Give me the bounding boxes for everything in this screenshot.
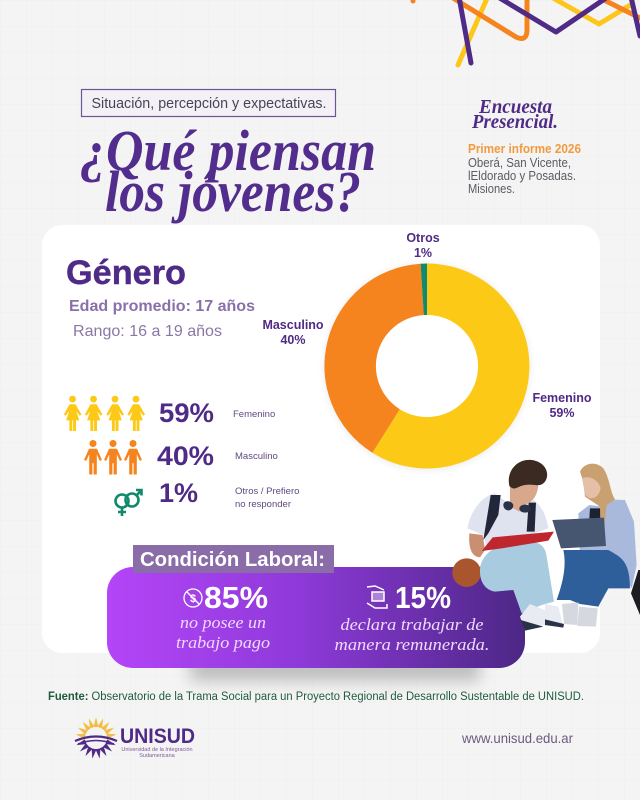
donut labels [262,231,592,420]
donut chart [323,263,531,471]
website: www.unisud.edu.ar [461,730,573,746]
icons: male figures [84,440,142,474]
panel shadow [190,655,480,681]
survey details [468,142,581,196]
logo: UNISUD [75,717,195,759]
age range: Rango: 16 a 19 años [73,323,222,340]
stat: 1%: 1% [159,478,198,508]
decorative ribbon lines [410,0,640,65]
title: ¿Qué piensan [80,118,376,183]
text: paid work: manera remunerada. [334,635,490,654]
label: others [235,486,299,510]
stat: 40%: 40% [157,441,214,471]
survey heading [471,96,558,133]
survey heading: Encuesta [478,96,552,118]
text: no paid work: trabajo pago [176,633,270,652]
bag [631,570,640,617]
logo subtitle: Universidad de la Integración [121,747,193,753]
icon: gender symbol [116,490,142,516]
boy [467,460,564,631]
stat: 85%: 85% [204,580,268,615]
survey details: Primer informe 2026 [468,142,581,156]
white card [42,225,600,653]
label: Masculino: Masculino [235,451,278,462]
average age: Edad promedio: 17 años [69,298,255,315]
subtitle box [82,90,336,116]
title [80,118,376,224]
icon: paid work [367,586,387,608]
donut labels: 59% [549,406,575,420]
source note: Fuente: Observatorio de la Trama Social para un Proyecto Regional de Desarrollo Sustentable de UNISUD. [48,691,584,703]
label: Femenino: Femenino [233,409,275,420]
donut labels: Masculino [262,318,324,332]
logo subtitle [121,747,193,759]
donut labels: 1% [414,246,432,260]
heading: Género: Género [66,254,186,292]
donut labels: 40% [280,333,306,347]
stat: 59%: 59% [159,398,214,428]
title: los jóvenes? [105,159,361,224]
icon: sun [75,717,117,759]
label: others: no responder [235,499,291,510]
text: paid work [334,615,490,654]
icons: female figures [64,396,145,431]
logo subtitle: Sudamericana [139,753,176,759]
icon: no money [184,589,202,607]
panel: employment [107,567,525,668]
label: others: Otros / Prefiero [235,486,299,497]
icon: no money: $ [190,593,196,605]
donut labels: Femenino [532,391,592,405]
basketball [452,558,481,587]
survey details: Oberá, San Vicente, [468,156,571,170]
label: Condición Laboral: Condición Laboral: [140,549,325,571]
stat: 15%: 15% [395,580,451,615]
wordmark: UNISUD [120,724,195,748]
survey heading: Presencial. [471,111,558,133]
girl [552,464,637,627]
subtitle box: Situación, percepción y expectativas. [92,96,326,112]
text: no paid work: no posee un [180,613,266,632]
survey details: Misiones. [468,182,515,196]
text: no paid work [176,613,270,652]
donut labels: Otros [406,231,440,245]
survey details: lEldorado y Posadas. [468,169,576,183]
photo: students [452,460,640,631]
text: paid work: declara trabajar de [340,615,484,634]
